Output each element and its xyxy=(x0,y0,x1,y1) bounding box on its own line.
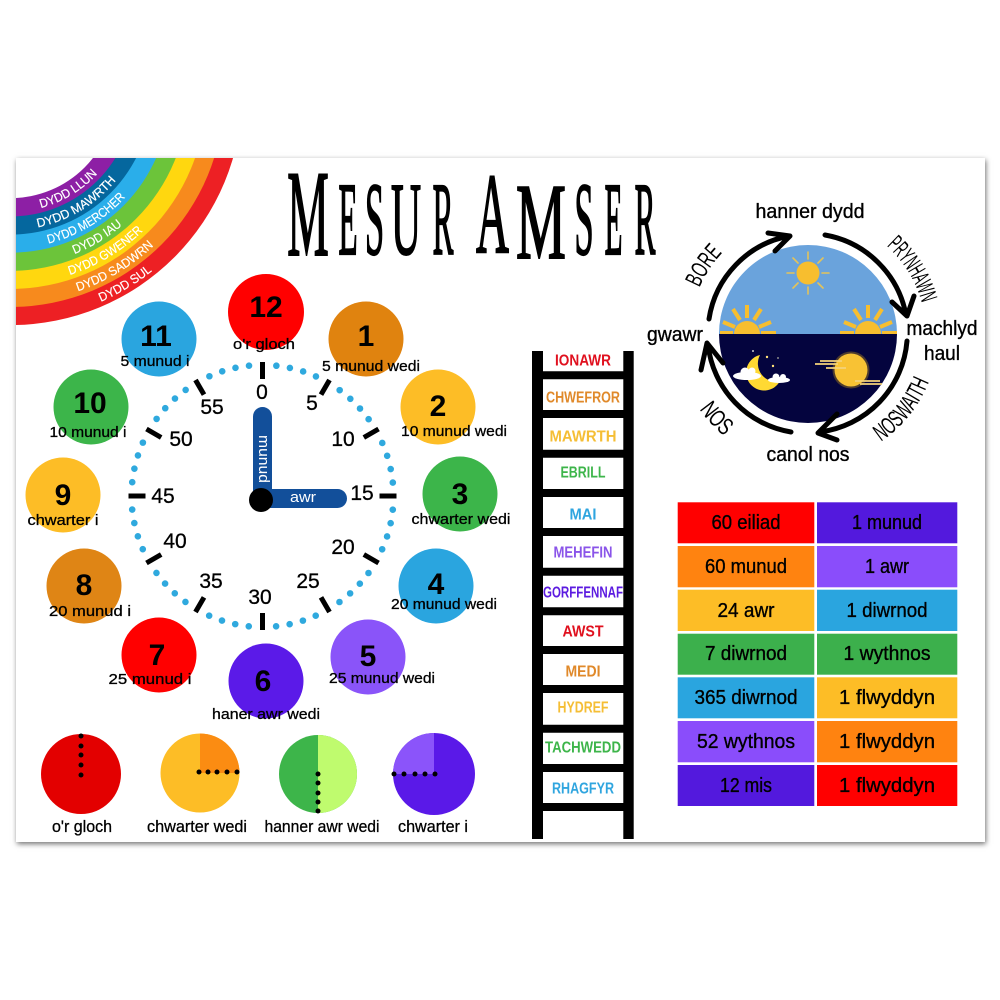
row: 365 diwrnod = 1 flwyddyn xyxy=(678,677,957,718)
minute hand xyxy=(253,407,272,507)
five-minute ticks xyxy=(126,360,398,632)
hour 10: 10 xyxy=(73,387,107,420)
month names: IONAWR xyxy=(555,352,611,370)
row: 52 wythnos = 1 flwyddyn xyxy=(678,721,957,762)
months ladder xyxy=(532,351,634,839)
month names xyxy=(543,352,623,798)
ladder frame xyxy=(532,351,634,839)
hour 6 xyxy=(212,644,320,723)
label: bore: BORE xyxy=(685,242,722,287)
month names: EBRILL xyxy=(560,464,606,482)
rainbow of days of the week: DYDD SADWRN xyxy=(76,240,153,292)
row: 12 mis = 1 flwyddyn: 12 mis xyxy=(720,775,772,797)
row: 7 diwrnod = 1 wythnos xyxy=(678,634,957,675)
title: Mesur Amser: E xyxy=(605,161,622,277)
hour 7 xyxy=(108,618,196,692)
minute numbers: 35 xyxy=(199,570,223,593)
month names: GORFFENNAF xyxy=(543,584,623,602)
hour 5 xyxy=(329,620,435,694)
row: 365 diwrnod = 1 flwyddyn: 365 diwrnod xyxy=(694,687,798,709)
row: 7 diwrnod = 1 wythnos: 1 wythnos xyxy=(844,643,930,665)
title: Mesur Amser: M xyxy=(516,161,566,282)
hour 11: 5 munud i xyxy=(120,353,190,370)
row: 12 mis = 1 flwyddyn xyxy=(678,765,957,806)
title: Mesur Amser: A xyxy=(476,151,509,277)
arrow: bore xyxy=(709,233,790,319)
title: Mesur Amser: R xyxy=(433,162,454,277)
fraction circle: o'r gloch: o'r gloch xyxy=(52,817,112,836)
hour 3 xyxy=(412,456,510,532)
minute numbers: 30 xyxy=(248,586,272,609)
title: Mesur Amser: E xyxy=(338,162,358,277)
row: 60 munud = 1 awr: 60 munud xyxy=(705,556,787,578)
minute numbers xyxy=(151,381,374,609)
minute hand: munud xyxy=(255,435,272,483)
hour 12: o'r gloch xyxy=(233,336,295,353)
hour 6: haner awr wedi xyxy=(212,706,320,723)
rainbow of days of the week xyxy=(16,158,233,325)
row: 60 eiliad = 1 munud xyxy=(678,502,957,543)
row: 60 munud = 1 awr: 1 awr xyxy=(865,556,909,578)
hour 12 xyxy=(228,274,304,353)
hour 4: 4 xyxy=(428,568,445,601)
month names: MEHEFIN xyxy=(554,544,612,562)
icon: full moon with wisps xyxy=(815,352,882,388)
hour 11 xyxy=(120,302,196,376)
minute numbers: 5 xyxy=(306,392,318,415)
arrow: nos xyxy=(701,343,791,432)
fraction circle: o'r gloch xyxy=(41,734,121,836)
fraction circle: chwarter wedi xyxy=(147,734,247,836)
row: 365 diwrnod = 1 flwyddyn: 1 flwyddyn xyxy=(839,687,935,709)
clock face with minute ring xyxy=(126,360,398,632)
minute numbers: 15 xyxy=(350,482,374,505)
row: 52 wythnos = 1 flwyddyn: 52 wythnos xyxy=(697,731,795,753)
month names: MAI xyxy=(570,506,596,524)
minute numbers: 25 xyxy=(296,570,320,593)
hour 4: 20 munud wedi xyxy=(391,596,497,613)
row: 24 awr = 1 diwrnod: 24 awr xyxy=(718,600,775,622)
rainbow of days of the week: DYDD MERCHER xyxy=(46,192,126,244)
rainbow of days of the week: DYDD IAU xyxy=(72,219,121,254)
hour 1: 5 munud wedi xyxy=(322,358,420,375)
row: 60 eiliad = 1 munud: 60 eiliad xyxy=(712,512,780,534)
rainbow of days of the week: DYDD GWENER xyxy=(68,226,143,275)
hour 9 xyxy=(26,458,100,532)
hour 12: 12 xyxy=(249,291,283,324)
clock hub xyxy=(249,488,273,512)
hour 3: chwarter wedi xyxy=(412,511,510,528)
hour 2: 2 xyxy=(430,390,446,423)
minute numbers: 20 xyxy=(331,536,355,559)
hour 1: 1 xyxy=(358,320,374,353)
hour 9: 9 xyxy=(55,479,71,512)
hour 3: 3 xyxy=(452,478,468,511)
title: Mesur Amser: U xyxy=(391,162,421,278)
hour 6: 6 xyxy=(255,665,271,698)
label: machlyd haul: machlyd xyxy=(906,318,978,340)
fraction circle: chwarter i xyxy=(392,733,475,836)
fraction circle: hanner awr wedi: hanner awr wedi xyxy=(264,817,380,836)
title: Mesur Amser: M xyxy=(287,147,329,283)
dotted minute ring xyxy=(132,365,394,627)
hour 10 xyxy=(50,370,128,444)
label: canol nos: canol nos xyxy=(766,444,850,466)
hour 11: 11 xyxy=(140,320,172,353)
fraction circle: chwarter wedi: chwarter wedi xyxy=(147,817,247,836)
hour 2: 10 munud wedi xyxy=(401,423,507,440)
poster card xyxy=(16,158,985,842)
month names: TACHWEDD xyxy=(545,740,621,756)
hour 8 xyxy=(46,548,131,624)
hour 8: 20 munud i xyxy=(49,603,131,620)
fraction circle: chwarter i: chwarter i xyxy=(398,817,468,836)
hour 5: 5 xyxy=(360,640,376,673)
rainbow of days of the week: DYDD MAWRTH xyxy=(36,175,116,228)
month names: AWST xyxy=(562,624,604,640)
rainbow of days of the week: DYDD SUL xyxy=(98,266,152,302)
row: 60 munud = 1 awr xyxy=(678,546,957,587)
label: machlyd haul: haul xyxy=(924,343,960,365)
minute numbers: 10 xyxy=(331,428,355,451)
row: 60 eiliad = 1 munud: 1 munud xyxy=(852,512,922,534)
label: nos: NOS xyxy=(700,400,733,434)
icon: sunrise xyxy=(720,305,776,334)
hour 2 xyxy=(400,370,507,444)
icon: crescent moon with clouds xyxy=(733,350,790,391)
rainbow of days of the week: DYDD LLUN xyxy=(39,168,97,208)
hour 4 xyxy=(391,548,497,624)
minute numbers: 0 xyxy=(256,381,268,404)
day and night circle xyxy=(719,245,897,423)
fraction circle: hanner awr wedi xyxy=(264,735,380,836)
hour 7: 25 munud i xyxy=(108,671,192,688)
month names: MAWRTH xyxy=(550,428,616,446)
title: Mesur Amser: S xyxy=(365,161,384,277)
row: 24 awr = 1 diwrnod xyxy=(678,590,957,631)
title: Mesur Amser xyxy=(287,147,656,283)
hour 5: 25 munud wedi xyxy=(329,670,435,687)
hour 10: 10 munud i xyxy=(50,424,126,441)
label: gwawr: gwawr xyxy=(647,324,703,346)
month names: MEDI xyxy=(566,664,600,680)
arrow: prynhawn xyxy=(825,235,914,316)
hour 9: chwarter i xyxy=(28,512,98,529)
label: prynhawn: PRYNHAWN xyxy=(887,234,938,302)
icon: sunset xyxy=(840,305,897,334)
time equivalences table xyxy=(678,502,957,806)
row: 24 awr = 1 diwrnod: 1 diwrnod xyxy=(846,600,928,622)
arrow: noswaith xyxy=(818,341,907,440)
hour 8: 8 xyxy=(76,569,92,602)
minute numbers: 50 xyxy=(169,428,193,451)
hour hand: awr xyxy=(290,489,316,506)
label: noswaith: NOSWAITH xyxy=(872,376,929,441)
minute numbers: 55 xyxy=(200,396,224,419)
hour 1 xyxy=(322,302,420,376)
month names: RHAGFYR xyxy=(552,780,614,798)
title: Mesur Amser: R xyxy=(635,162,656,277)
label: machlyd haul xyxy=(906,318,978,365)
row: 12 mis = 1 flwyddyn: 1 flwyddyn xyxy=(839,775,935,797)
month names: CHWEFROR xyxy=(546,390,620,406)
row: 7 diwrnod = 1 wythnos: 7 diwrnod xyxy=(705,643,787,665)
label: hanner dydd: hanner dydd xyxy=(756,201,864,223)
title: Mesur Amser: S xyxy=(574,161,594,277)
row: 52 wythnos = 1 flwyddyn: 1 flwyddyn xyxy=(839,731,935,753)
minute numbers: 45 xyxy=(151,485,175,508)
icon: midday sun xyxy=(787,252,829,294)
day cycle diagram xyxy=(647,201,978,466)
month names: HYDREF xyxy=(558,700,609,716)
hour hand xyxy=(253,489,347,508)
hour 7: 7 xyxy=(149,639,165,672)
minute numbers: 40 xyxy=(163,530,187,553)
